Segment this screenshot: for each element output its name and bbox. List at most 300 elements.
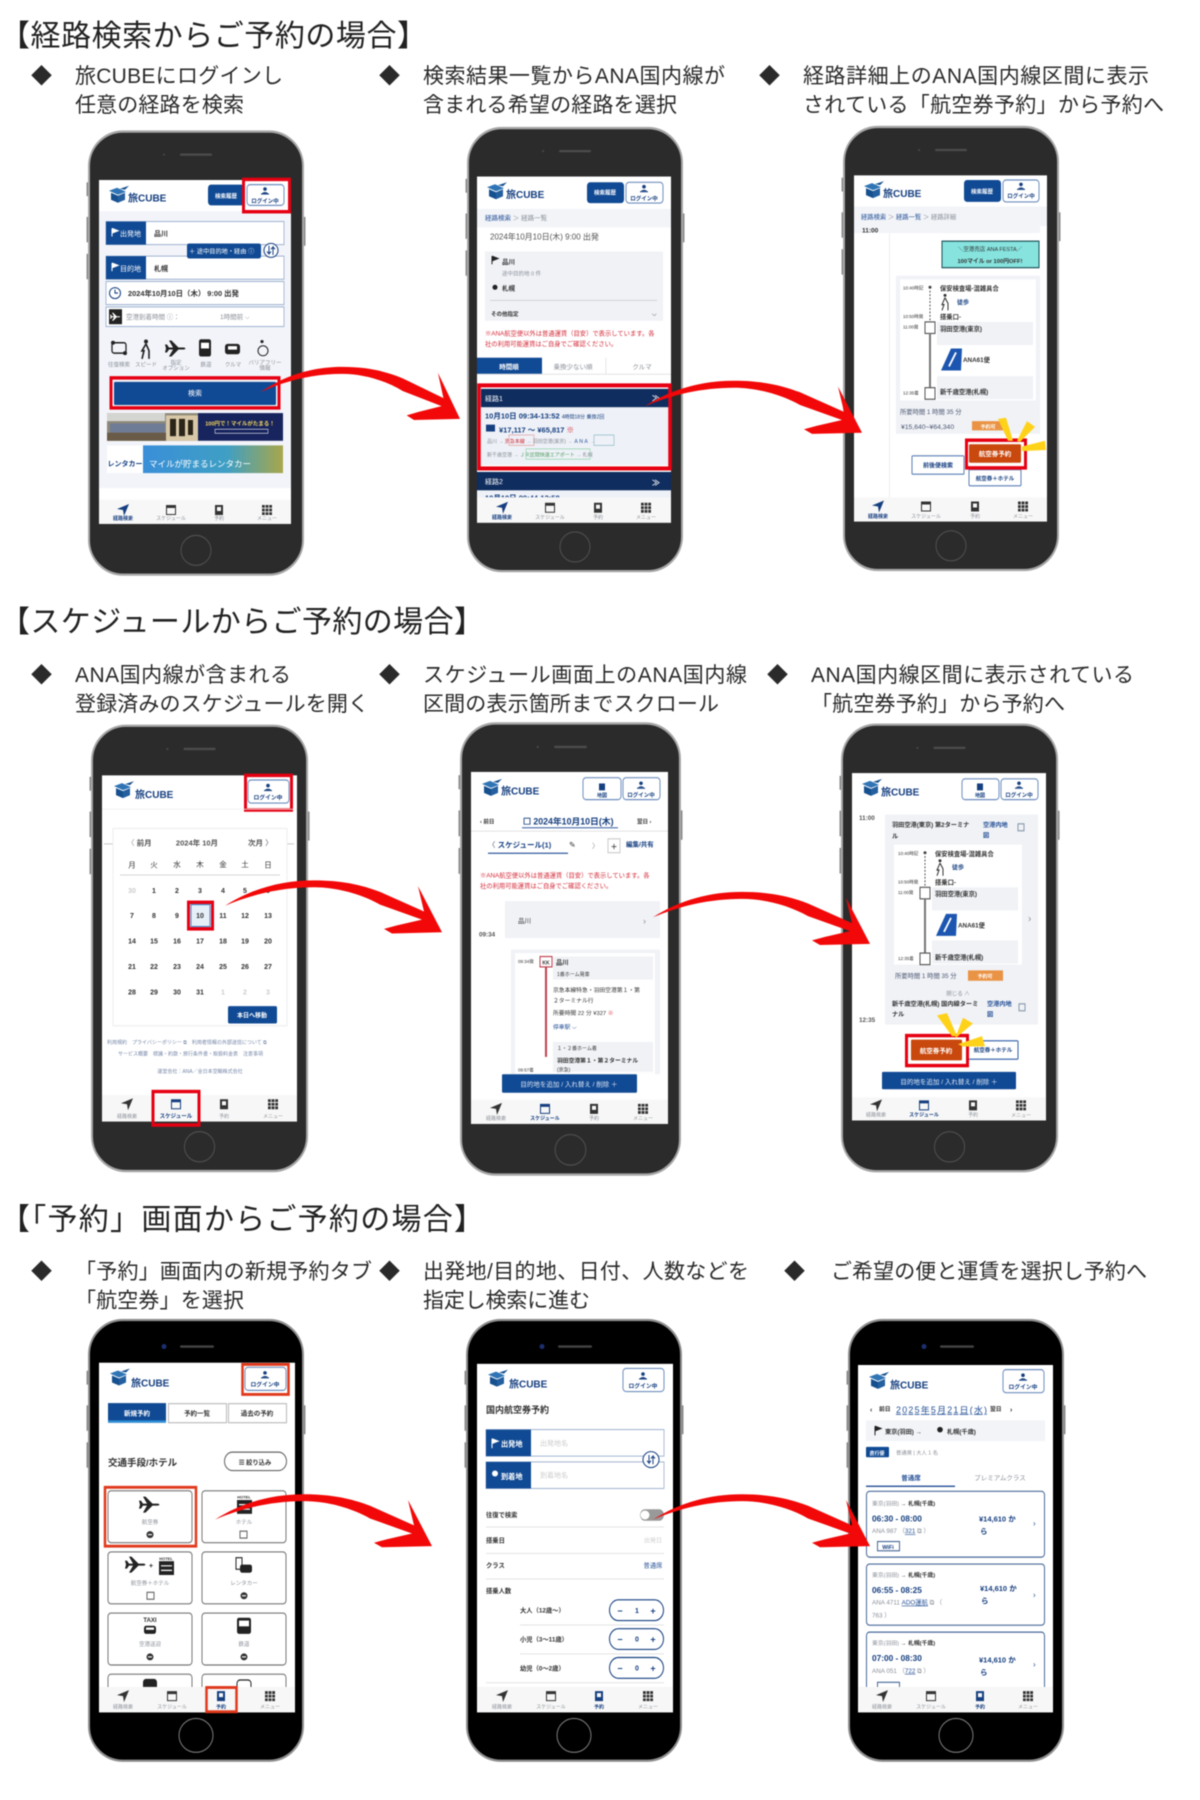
transport cards: 航空券＋ホテル: [131, 1579, 170, 1587]
flight detail panel: 予約可: [977, 973, 993, 980]
step 2 text: ◆: [379, 65, 400, 88]
banner: ANA work point: [107, 413, 283, 441]
date navigation: 2025年5月21日(水): [896, 1404, 987, 1415]
button: surrounding flights: 前後便検索: [923, 462, 953, 470]
route band: [866, 1420, 1045, 1441]
flight detail panel: 10:50時発: [898, 879, 919, 886]
arrow: step 1 to 2: [260, 367, 460, 420]
phone 5: schedule screen: 翌日 ›: [637, 819, 652, 826]
highlight: date 10: [188, 902, 212, 929]
step 3 text: ◆: [759, 65, 780, 88]
calendar: 30: [173, 989, 181, 996]
calendar: 22: [150, 964, 158, 971]
passenger steppers: +: [650, 1635, 656, 1645]
calendar: 25: [219, 964, 227, 971]
phone 1: route search screen: 検索: [188, 388, 202, 397]
calendar: 11: [219, 913, 227, 920]
train detail panel: ２ターミナル行: [553, 996, 594, 1004]
calendar: 1: [152, 888, 156, 895]
route band: 東京(羽田) →: [885, 1428, 922, 1436]
train detail panel: 09:57着: [518, 1067, 534, 1074]
step 1 text: ◆: [31, 1261, 52, 1284]
phone 9: flight list screen: ログイン中: [1009, 1383, 1038, 1391]
button: ticket reservation: [969, 444, 1021, 463]
bottom nav: [471, 1100, 668, 1124]
banner: rental car: [107, 445, 283, 473]
step 1 text: [31, 664, 369, 716]
phone 7: reservation menu screen: 旅CUBE: [131, 1376, 170, 1389]
phone 1: route search screen: ログイン中: [251, 197, 279, 205]
form rows: 搭乗人数: [486, 1586, 512, 1595]
bottom nav: スケジュール: [916, 1704, 946, 1711]
flight detail panel: 10:40時記: [898, 851, 919, 857]
calendar: 日: [264, 860, 272, 869]
train detail panel: KK: [542, 960, 550, 966]
route 1 card: ≫: [652, 394, 660, 403]
route summary panel: [485, 252, 663, 321]
calendar: 18: [219, 939, 227, 946]
bottom nav: メニュー: [638, 1705, 658, 1711]
arrow: step 2 to 3: [645, 381, 862, 434]
bottom nav: スケジュール: [530, 1115, 560, 1122]
calendar: 5: [243, 888, 247, 895]
bottom nav: スケジュール: [156, 515, 186, 522]
highlight: reservation tab: [206, 1688, 236, 1712]
step 2 text: [379, 664, 747, 716]
ANA FESTA promo box: 100マイル or 100円OFF!: [957, 258, 1023, 265]
button: ticket reservation: 航空券予約: [979, 449, 1012, 458]
button: air + hotel: 航空券＋ホテル: [974, 1046, 1013, 1054]
bottom nav: 予約: [593, 514, 603, 521]
date navigation: ‹: [870, 1407, 873, 1414]
origin row: [479, 901, 660, 939]
form rows: 往復で検索: [486, 1510, 517, 1519]
calendar: 1: [221, 989, 225, 996]
calendar: 13: [264, 913, 272, 920]
sort tabs: 時間順: [499, 362, 519, 371]
red notice: 社の利用可能運賃はご自身でご確認ください。: [485, 339, 617, 348]
section: from reservation screen: [0, 1204, 1147, 1761]
flight card 1: [866, 1491, 1044, 1557]
flight card 2: ›: [1033, 1591, 1036, 1600]
button: ticket reservation: [911, 1040, 962, 1060]
calendar: 14: [128, 939, 136, 946]
flight card 2: 763 ）: [872, 1612, 891, 1619]
flight detail panel: 所要時間 1 時間 35 分: [900, 407, 962, 416]
filter summary: [866, 1447, 938, 1457]
button: add destination: 目的地を追加 / 入れ替え / 削除 ＋: [900, 1077, 998, 1086]
phone 1: route search screen: [86, 132, 306, 575]
button: add destination: [882, 1072, 1016, 1089]
calendar: 6: [266, 888, 270, 895]
route 2 card: 経路2: [485, 477, 503, 486]
sort tabs: 乗換少ない順: [554, 362, 593, 371]
step 1 text: [31, 65, 283, 117]
bottom nav: 経路検索: [486, 1115, 506, 1122]
button: air + hotel: [968, 1041, 1018, 1059]
route 2 card: 10月10日 09:44-13:58: [485, 493, 560, 502]
heading: reservation: 【「予約」画面からご予約の場合】: [0, 1204, 484, 1237]
bottom nav: 予約: [975, 1704, 985, 1711]
step 1 text: ANA国内線が含まれる: [75, 664, 291, 687]
button: surrounding flights: [912, 456, 964, 474]
step 1 text: 任意の経路を検索: [75, 94, 244, 117]
flight detail panel: 11:00: [859, 815, 875, 822]
phone 2: route list screen: 経路検索 ＞ 経路一覧: [485, 213, 548, 222]
step 1 text: ◆: [31, 65, 52, 88]
calendar: 8: [152, 913, 156, 920]
filter pill: [224, 1452, 286, 1471]
phone 1: route search screen: 出発地: [120, 229, 141, 238]
flight detail panel: 徒歩: [957, 298, 969, 306]
highlight: air ticket card: [105, 1487, 196, 1546]
calendar: 本日へ移動: [237, 1011, 267, 1019]
phone 1: route search screen: 情報: [259, 364, 271, 372]
flight card 2: ANA 4711 ADO運航 ⧉ （: [872, 1598, 942, 1607]
flight card 1: 東京(羽田) → 札幌(千歳): [872, 1499, 935, 1507]
calendar: 7: [130, 913, 134, 920]
phone 5: schedule screen: ✎: [569, 841, 576, 850]
footer links: 運営会社：ANA／全日本空輸株式会社: [157, 1068, 243, 1075]
reservation tabs: 新規予約: [124, 1408, 150, 1417]
flight card 2: ¥14,610 か: [980, 1584, 1017, 1593]
flight detail panel: 羽田空港(東京) 第2ターミナ: [892, 821, 969, 829]
flight card 2: [866, 1564, 1044, 1625]
passenger steppers: 0: [635, 1666, 639, 1673]
heading: route search: 【経路検索からご予約の場合】: [0, 20, 427, 53]
bottom nav: [477, 1687, 673, 1712]
reservation tabs: [108, 1403, 286, 1423]
calendar: 4: [221, 888, 225, 895]
bottom nav: 予約: [216, 1704, 226, 1711]
transport cards: 空港送迎: [139, 1640, 161, 1648]
flight card 3: ANA 051 （722 ⧉ ）: [872, 1668, 930, 1675]
route summary panel: ⌵: [652, 312, 657, 318]
bottom nav: 予約: [219, 1113, 229, 1120]
phone 3: route detail screen: 11:00: [862, 227, 879, 234]
button: air + hotel: 航空券＋ホテル: [976, 474, 1015, 482]
bottom nav: 経路検索: [492, 1704, 512, 1711]
train detail panel: 品川: [556, 958, 569, 966]
class tabs: 普通席: [901, 1473, 921, 1482]
origin row: ›: [643, 916, 646, 926]
train detail panel: [511, 950, 660, 1074]
origin and destination inputs: 到着地名: [540, 1471, 568, 1480]
transport cards: ホテル: [236, 1519, 253, 1526]
flight detail panel: 保安検査場-混雑具合: [940, 283, 999, 292]
calendar: 12: [241, 913, 249, 920]
bottom nav: [99, 1687, 295, 1712]
bottom nav: [477, 497, 671, 523]
step 1 text: 「航空券」を選択: [75, 1289, 244, 1312]
phone 7: reservation menu screen: 交通手段/ホテル: [108, 1457, 178, 1469]
calendar: 24: [196, 964, 204, 971]
bottom nav: スケジュール: [909, 1112, 939, 1119]
red notice: 社の利用可能運賃はご自身でご確認ください。: [480, 881, 612, 890]
phone 7: reservation menu screen: ログイン中: [251, 1381, 280, 1389]
passenger steppers: −: [617, 1663, 623, 1673]
flight card 3: ¥14,610 か: [979, 1655, 1016, 1664]
phone 3: route detail screen: 検索履歴: [971, 188, 993, 196]
calendar: 9: [175, 913, 179, 920]
passenger steppers: −: [617, 1606, 623, 1616]
bottom nav: 予約: [214, 515, 224, 522]
ANA FESTA promo box: [942, 241, 1039, 268]
step 3 text: [759, 65, 1164, 117]
phone 5: schedule screen: ログイン中: [627, 791, 655, 799]
phone 6: schedule flight detail screen: [839, 725, 1060, 1171]
flight detail panel: [896, 276, 1040, 434]
passenger steppers: −: [617, 1635, 623, 1645]
phone 5: schedule screen: 〉: [592, 842, 599, 850]
flight card 1: ›: [1033, 1519, 1036, 1528]
bottom nav: スケジュール: [911, 513, 941, 520]
class tabs: プレミアムクラス: [974, 1474, 1026, 1482]
banner: rental car: レンタカー: [108, 459, 142, 468]
phone 4: calendar screen: 旅CUBE: [135, 788, 174, 801]
footer links: [107, 1039, 267, 1075]
transport cards: +: [149, 1563, 153, 1570]
phone 7: reservation menu screen: [86, 1320, 306, 1761]
step 3 text: 「航空券予約」から予約へ: [811, 693, 1065, 716]
route summary panel: 途中目的地 0 件: [502, 269, 542, 277]
calendar: 2: [175, 888, 179, 895]
flight card 3: ら: [980, 1668, 987, 1677]
phone 1: route search screen: 2024年10月10日（木） 9:00 出発: [128, 289, 240, 298]
flight card 2: 東京(羽田) → 札幌(千歳): [872, 1571, 935, 1579]
flight card 1: WiFi: [882, 1545, 894, 1551]
flight card 1: ら: [980, 1527, 987, 1536]
flight detail panel: 空港内地: [983, 821, 1009, 829]
route 1 card: 品川 → 京急本線 → 羽田空港(東京) → ＡＮＡ →: [487, 438, 595, 445]
phone 2: route list screen: ログイン中: [630, 194, 658, 202]
train detail panel: (京急): [557, 1067, 571, 1074]
phone 1: route search screen: 目的地: [120, 264, 141, 273]
flight detail panel: 空港内地: [987, 1000, 1013, 1008]
calendar: 30: [128, 888, 136, 895]
phone 5: schedule screen: 地図: [597, 792, 607, 799]
banner: ANA work point: 100円で！マイルがたまる！: [205, 419, 275, 427]
passenger steppers: 1: [635, 1608, 639, 1615]
phone 2: route list screen: 旅CUBE: [506, 188, 545, 201]
step 1 text: 登録済みのスケジュールを開く: [75, 693, 369, 716]
step 3 text: [767, 664, 1134, 716]
phone 5: schedule screen: 編集/共有: [626, 840, 654, 849]
transport cards: HOTEL: [237, 1495, 251, 1500]
phone 5: schedule screen: 旅CUBE: [501, 784, 540, 797]
step 1 text: 「予約」画面内の新規予約タブ: [75, 1261, 372, 1284]
phone 2: route list screen: 2024年10月10日(木) 9:00 出発: [490, 232, 599, 242]
filter pill: ☰ 絞り込み: [239, 1457, 272, 1466]
flight detail panel: 予約可: [980, 423, 996, 430]
flight detail panel: 保安検査場-混雑具合: [935, 849, 994, 858]
red notice: [485, 328, 655, 348]
red notice: ※ANA航空便以外は普通運賃（目安）で表示しています。各: [480, 871, 650, 880]
flight detail panel: 搭乗口-: [940, 312, 961, 321]
calendar: 17: [196, 939, 204, 946]
flight detail panel: 羽田空港(東京): [935, 889, 977, 898]
flight card 2: ら: [981, 1596, 988, 1605]
calendar: 31: [196, 989, 204, 996]
date navigation: ›: [1010, 1407, 1013, 1414]
flight card 3: 07:00 - 08:30: [872, 1653, 922, 1663]
calendar: 木: [196, 859, 204, 869]
transport cards: 鉄道: [238, 1640, 250, 1648]
step 1 text: [31, 1261, 372, 1312]
calendar: 27: [264, 964, 272, 971]
origin row: 09:34: [479, 932, 496, 939]
step 2 text: 含まれる希望の経路を選択: [423, 94, 677, 117]
phone 1: route search screen: 札幌: [154, 264, 168, 273]
bottom nav: 予約: [589, 1115, 599, 1122]
phone 3: route detail screen: ログイン中: [1007, 192, 1035, 200]
flight card 1: 06:30 - 08:00: [872, 1513, 922, 1523]
bottom nav: メニュー: [257, 516, 277, 522]
phone 3: route detail screen: 経路検索 ＞ 経路一覧 ＞ 経路詳細: [861, 212, 956, 221]
train detail panel: 京急本線特急・羽田空港第１・第: [553, 986, 640, 994]
calendar: 21: [128, 964, 136, 971]
step 1 text: ◆: [31, 664, 52, 687]
footer links: 利用規約 プライバシーポリシー ⧉ 利用者情報の外部送信について ⧉: [107, 1039, 267, 1046]
route 1 card: 10月10日 09:34-13:52 4時間18分 乗換2回: [485, 411, 604, 420]
phone 8: domestic flight search screen: 国内航空券予約: [486, 1404, 549, 1415]
flight detail panel: 新千歳空港(札幌): [935, 953, 983, 962]
phone 1: route search screen: 鉄道: [200, 361, 212, 369]
highlight: search button: [111, 378, 279, 408]
form rows: 出発日: [644, 1536, 662, 1544]
phone 2: route list screen: 検索履歴: [594, 189, 616, 197]
phone 5: schedule screen: ‹ 前日: [480, 818, 494, 826]
phone 1: route search screen: 往復検索: [108, 361, 130, 369]
transport cards: レンタカー: [230, 1579, 258, 1587]
filter summary: 普通席 | 大人 1 名: [896, 1449, 938, 1457]
step 3 text: ご希望の便と運賃を選択し予約へ: [831, 1261, 1147, 1284]
train detail panel: 所要時間 22 分 ¥327 ※: [553, 1009, 614, 1017]
step 2 text: 区間の表示箇所までスクロール: [423, 693, 719, 716]
reservation tabs: 予約一覧: [184, 1408, 210, 1417]
phone 6: schedule flight detail screen: 旅CUBE: [881, 786, 920, 799]
calendar: 次月 〉: [248, 837, 273, 847]
flight detail panel: ›: [1028, 914, 1031, 925]
flight detail panel: 12:35着: [903, 389, 919, 396]
phone 1: route search screen: スピード: [135, 362, 157, 369]
flight detail panel: 10:40時記: [903, 285, 924, 291]
calendar: 3: [266, 989, 270, 996]
step 2 text: [379, 1261, 749, 1312]
bottom nav: [858, 1687, 1053, 1712]
passenger steppers: [486, 1600, 664, 1683]
phone 8: domestic flight search screen: ログイン中: [629, 1382, 658, 1390]
phone 1: route search screen: 指定: [170, 358, 182, 366]
phone 1: route search screen: ＋ 途中目的地・経由 ⓘ: [189, 248, 254, 256]
flight detail panel: 搭乗口-: [935, 878, 956, 887]
route band: 札幌(千歳): [947, 1428, 976, 1436]
calendar: 2: [243, 989, 247, 996]
bottom nav: 予約: [594, 1704, 604, 1711]
phone 3: route detail screen: [842, 127, 1060, 570]
phone 5: schedule screen: ＋: [611, 843, 617, 851]
flight card 3: [866, 1632, 1044, 1701]
bottom nav: 経路検索: [866, 1112, 886, 1119]
sort tabs: クルマ: [632, 363, 652, 371]
train detail panel: １・２番ホーム着: [557, 1045, 597, 1052]
button: air + hotel: [969, 470, 1021, 486]
flight detail panel: [859, 815, 1038, 1025]
flight detail panel: 羽田空港(東京): [940, 324, 982, 333]
passenger steppers: +: [650, 1663, 656, 1673]
phone 1: route search screen: バリアフリー: [248, 359, 282, 366]
step 2 text: スケジュール画面上のANA国内線: [423, 664, 747, 687]
bottom nav: 経路検索: [492, 514, 512, 521]
flight detail panel: 所要時間 1 時間 35 分: [895, 971, 957, 980]
flight detail panel: 新千歳空港(札幌) 国内線ターミ: [892, 1000, 978, 1008]
bottom nav: 経路検索: [113, 515, 133, 522]
transport cards: 航空券: [142, 1518, 159, 1526]
train detail panel: 09:34発: [518, 958, 534, 965]
button: add destination: 目的地を追加 / 入れ替え / 削除 ＋: [520, 1080, 618, 1089]
calendar: 月: [128, 860, 136, 869]
origin and destination inputs: 出発地名: [540, 1438, 568, 1447]
arrow: step 2 to 3: [653, 1494, 870, 1547]
phone 1: route search screen: 検索履歴: [215, 192, 237, 200]
flight card 3: ›: [1033, 1660, 1036, 1669]
step 3 text: されている「航空券予約」から予約へ: [803, 94, 1164, 117]
phone 4: calendar screen: ログイン中: [254, 793, 283, 801]
arrow: step 1 to 2: [225, 880, 442, 933]
bottom nav: スケジュール: [536, 1704, 566, 1711]
bottom nav: スケジュール: [160, 1112, 193, 1120]
passenger steppers: 0: [635, 1637, 639, 1644]
calendar: 29: [150, 989, 158, 996]
highlight: route 1: [479, 385, 670, 468]
flight card 3: 東京(羽田) → 札幌(千歳): [872, 1639, 935, 1647]
step 3 text: ◆: [784, 1261, 805, 1284]
step 2 text: 出発地/目的地、日付、人数などを: [423, 1261, 749, 1284]
section: route search: [0, 20, 1164, 575]
reservation tabs: 過去の予約: [241, 1408, 274, 1417]
flight detail panel: ナル: [892, 1011, 904, 1018]
flight detail panel: ル: [892, 834, 898, 841]
flight detail panel: ¥15,640~¥64,340: [901, 424, 954, 431]
phone 5: schedule screen: 〈 スケジュール(1): [488, 841, 552, 850]
route 1 card: 経路1: [485, 394, 503, 403]
step 2 text: ◆: [379, 664, 400, 687]
phone 2: route list screen: [466, 128, 684, 571]
bottom nav: 経路検索: [868, 513, 888, 520]
route summary panel: その他指定: [491, 310, 519, 318]
train detail panel: 羽田空港第１・第２ターミナル: [557, 1056, 638, 1064]
passenger steppers: 小児（3〜11歳）: [520, 1635, 568, 1644]
banner: rental car: マイルが貯まるレンタカー: [149, 459, 251, 469]
phone 5: schedule screen: ☐ 2024年10月10日(木): [523, 815, 614, 826]
button: ticket reservation: 航空券予約: [920, 1046, 953, 1055]
phone 4: calendar screen: [89, 726, 310, 1171]
phone 6: schedule flight detail screen: 地図: [975, 792, 985, 799]
phone 1: route search screen: 品川: [154, 230, 168, 238]
bottom nav: 予約: [968, 1112, 978, 1119]
flight card 1: ¥14,610 か: [979, 1515, 1016, 1524]
origin row: 品川: [518, 917, 531, 925]
bottom nav: メニュー: [633, 1116, 653, 1122]
phone 8: domestic flight search screen: 旅CUBE: [509, 1378, 548, 1391]
flight detail panel: ANA61便: [958, 920, 986, 929]
highlight: ticket reservation: [966, 440, 1026, 468]
sort tabs: [477, 358, 671, 375]
route 2 card: [477, 472, 671, 502]
calendar: 26: [241, 964, 249, 971]
step 2 text: 指定し検索に進む: [423, 1289, 590, 1312]
bottom nav: 予約: [970, 513, 980, 520]
